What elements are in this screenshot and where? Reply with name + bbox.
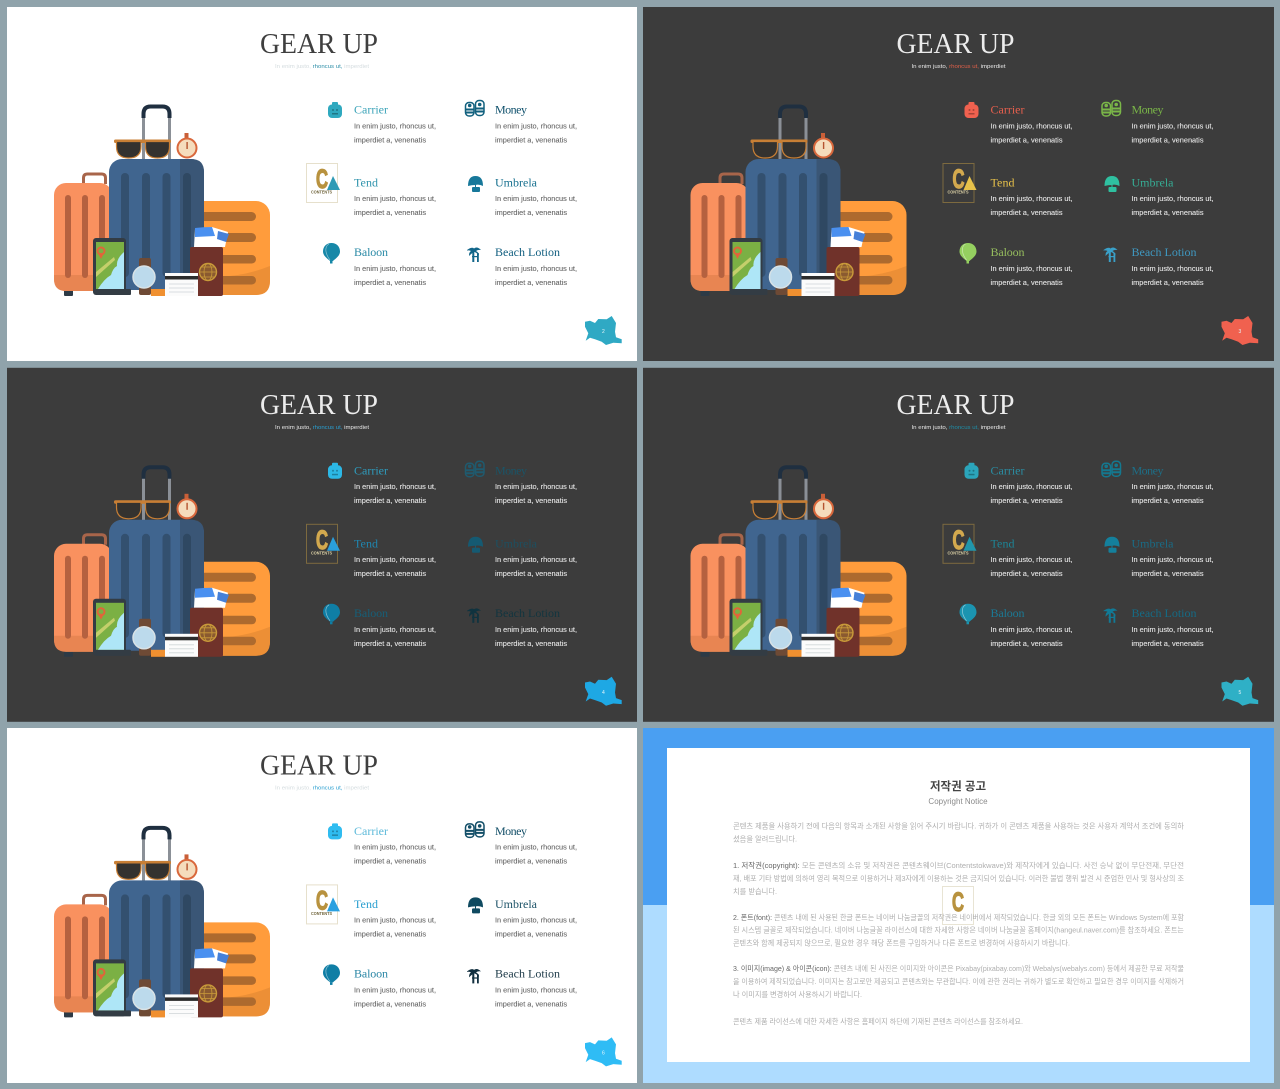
description: In enim justo, rhoncus ut, bbox=[354, 265, 436, 273]
description: imperdiet a, venenatis bbox=[495, 570, 567, 578]
icon: umbrella bbox=[468, 176, 483, 192]
subtitle: In enim justo, rhoncus ut, imperdiet bbox=[275, 425, 369, 431]
description: In enim justo, rhoncus ut, bbox=[990, 265, 1073, 273]
item title: Baloon bbox=[354, 606, 388, 620]
item: Baloon bbox=[323, 604, 436, 648]
icon: balloon bbox=[960, 604, 976, 624]
item: Money bbox=[466, 461, 577, 505]
page badge bbox=[1222, 677, 1258, 706]
description bbox=[354, 986, 436, 1008]
panel: slide 3 dark blue fade bbox=[7, 368, 637, 722]
icon: balloon bbox=[323, 964, 340, 985]
description bbox=[1132, 556, 1214, 578]
description: In enim justo, rhoncus ut, bbox=[495, 265, 577, 273]
item: Umbrela bbox=[468, 897, 577, 938]
item: Umbrela bbox=[468, 176, 577, 217]
item title: Money bbox=[1132, 463, 1164, 477]
item title: Carrier bbox=[354, 824, 388, 838]
icon: logo bbox=[943, 524, 976, 563]
title: GEAR UP bbox=[260, 390, 378, 421]
description: In enim justo, rhoncus ut, bbox=[354, 986, 436, 994]
item title: Carrier bbox=[354, 463, 388, 477]
notice body text: 을 이용하여 제작되었습니다. 이미지는 참고로만 제공되고 콘텐츠와는 무관합니다. 이에 관한 권리는 귀하가 별도로 확인하고 필요한 경우 이미지를 삭제하거 bbox=[733, 977, 1184, 986]
description bbox=[495, 844, 577, 866]
description: In enim justo, rhoncus ut, bbox=[495, 122, 577, 130]
item: Umbrela bbox=[468, 536, 577, 578]
description: imperdiet a, venenatis bbox=[990, 640, 1063, 648]
description bbox=[1132, 265, 1214, 287]
description: In enim justo, rhoncus ut, bbox=[990, 195, 1073, 203]
description bbox=[1132, 483, 1214, 505]
description: imperdiet a, venenatis bbox=[1132, 640, 1204, 648]
item: Tend bbox=[943, 524, 1073, 578]
item title: Carrier bbox=[990, 102, 1024, 116]
description: In enim justo, rhoncus ut, bbox=[990, 626, 1073, 634]
item: Carrier bbox=[328, 823, 436, 866]
description: imperdiet a, venenatis bbox=[354, 858, 426, 866]
title: GEAR UP bbox=[896, 390, 1014, 421]
notice body text: 된 시스템 글꼴로 제작되었습니다. 네이버 나눔글꼴 라이선스에 대한 자세한 사항은 네이버 나눔글꼴 홈페이지(hangeul.naver.com)를 참조하세요. 폰트는 bbox=[733, 926, 1184, 934]
description: imperdiet a, venenatis bbox=[495, 497, 567, 505]
description bbox=[495, 556, 577, 578]
description: In enim justo, rhoncus ut, bbox=[354, 556, 436, 564]
description: imperdiet a, venenatis bbox=[354, 136, 426, 144]
icon: carrier bbox=[328, 823, 342, 839]
icon: logo bbox=[306, 524, 340, 563]
item title: Beach Lotion bbox=[1132, 245, 1196, 259]
description: In enim justo, rhoncus ut, bbox=[354, 626, 436, 634]
item: Carrier bbox=[328, 463, 436, 505]
description: In enim justo, rhoncus ut, bbox=[354, 844, 436, 852]
item title: Baloon bbox=[354, 245, 388, 259]
item title: Umbrela bbox=[495, 536, 538, 550]
icon: logo: CONTENTS bbox=[948, 550, 969, 555]
description: imperdiet a, venenatis bbox=[354, 930, 426, 938]
item: Baloon bbox=[323, 243, 436, 287]
icon: money bbox=[466, 822, 484, 837]
item: Tend bbox=[306, 885, 436, 938]
item title: Beach Lotion bbox=[495, 966, 560, 980]
icon: logo bbox=[943, 164, 976, 202]
icon: carrier bbox=[328, 102, 342, 118]
page badge bbox=[585, 316, 622, 345]
description: imperdiet a, venenatis bbox=[495, 858, 567, 866]
icon: carrier bbox=[328, 463, 342, 479]
panel: slide 4 dark teal bbox=[643, 368, 1274, 722]
notice body text: 콘텐츠와 함께 제공되지 않으므로, 필요한 경우 해당 폰트를 구입하거나 다른 폰트로 변경하여 사용하시기 바랍니다. bbox=[733, 938, 1070, 948]
item: Tend bbox=[943, 164, 1073, 217]
icon: balloon bbox=[323, 604, 340, 624]
icon: carrier bbox=[964, 463, 978, 479]
item: Baloon bbox=[960, 243, 1073, 287]
item: Beach Lotion bbox=[1104, 606, 1214, 648]
item: Beach Lotion bbox=[467, 606, 577, 648]
item title: Tend bbox=[990, 176, 1014, 190]
page badge: 4 bbox=[602, 690, 605, 696]
description: In enim justo, rhoncus ut, bbox=[990, 122, 1073, 130]
notice body text: 치를 받습니다. bbox=[733, 887, 777, 896]
description: imperdiet a, venenatis bbox=[495, 136, 567, 144]
item: Baloon bbox=[323, 964, 436, 1008]
icon: money bbox=[466, 461, 484, 477]
watermark logo: C bbox=[952, 887, 964, 917]
item: Beach Lotion bbox=[467, 245, 577, 287]
description: In enim justo, rhoncus ut, bbox=[1132, 626, 1214, 634]
icon: palm bbox=[467, 248, 481, 262]
icon: umbrella bbox=[1104, 537, 1120, 553]
icon: palm bbox=[467, 608, 481, 623]
description: In enim justo, rhoncus ut, bbox=[495, 195, 577, 203]
description: imperdiet a, venenatis bbox=[990, 497, 1063, 505]
description: In enim justo, rhoncus ut, bbox=[1132, 195, 1214, 203]
illustration: luggage bbox=[54, 828, 270, 1017]
description bbox=[354, 844, 436, 866]
notice body text: 재, 배포 기타 방법에 의하여 영리 목적으로 이용하거나 제3자에게 이용하는 것은 금지되어 있습니다. 이러한 불법 행위 발견 시 준엄한 민사 및 형사상의 조 bbox=[733, 874, 1184, 883]
item: Carrier bbox=[328, 102, 436, 144]
notice background top bbox=[643, 728, 1274, 905]
item: Umbrela bbox=[1104, 176, 1214, 217]
description: imperdiet a, venenatis bbox=[354, 1000, 426, 1008]
page badge: 3 bbox=[1238, 329, 1242, 335]
panel: slide 1 light bbox=[7, 7, 637, 361]
icon: logo: CONTENTS bbox=[948, 190, 969, 194]
icon: umbrella bbox=[1104, 176, 1120, 192]
illustration: luggage bbox=[54, 106, 270, 296]
description: In enim justo, rhoncus ut, bbox=[354, 916, 436, 924]
page badge: 2 bbox=[602, 329, 605, 335]
notice subheading: Copyright Notice bbox=[928, 797, 988, 806]
icon: balloon bbox=[323, 243, 340, 264]
item title: Beach Lotion bbox=[495, 245, 560, 259]
subtitle: In enim justo, rhoncus ut, imperdiet bbox=[275, 64, 369, 70]
notice heading: 저작권 공고 bbox=[930, 779, 986, 793]
description bbox=[495, 265, 577, 287]
icon: palm bbox=[1104, 248, 1118, 262]
icon: umbrella bbox=[468, 537, 483, 553]
item: Money bbox=[1102, 100, 1214, 144]
item title: Beach Lotion bbox=[495, 606, 560, 620]
item title: Baloon bbox=[990, 245, 1024, 259]
item title: Beach Lotion bbox=[1132, 606, 1196, 620]
page badge: 6 bbox=[602, 1050, 605, 1056]
icon: umbrella bbox=[468, 897, 483, 913]
description: In enim justo, rhoncus ut, bbox=[1132, 265, 1214, 273]
notice card bbox=[667, 748, 1250, 1062]
description bbox=[990, 556, 1073, 578]
notice body text bbox=[733, 822, 1184, 1026]
icon: money bbox=[1102, 461, 1120, 477]
item title: Umbrela bbox=[495, 897, 538, 911]
item title: Money bbox=[495, 102, 527, 116]
icon: money bbox=[466, 100, 484, 116]
subtitle: In enim justo, rhoncus ut, imperdiet bbox=[912, 64, 1006, 70]
item title: Money bbox=[1132, 102, 1164, 116]
page badge: 5 bbox=[1238, 690, 1242, 696]
item: Baloon bbox=[960, 604, 1073, 648]
item: Beach Lotion bbox=[467, 966, 577, 1008]
item title: Umbrela bbox=[495, 176, 538, 190]
icon: logo bbox=[306, 885, 340, 924]
description bbox=[354, 265, 436, 287]
description: In enim justo, rhoncus ut, bbox=[990, 483, 1073, 491]
notice body text: 콘텐츠 제품을 사용하기 전에 다음의 항목과 소개된 사항을 읽어 주시기 바랍니다. 귀하가 이 콘텐츠 제품을 사용하는 것은 사용자 계약서 조건에 동의하 bbox=[733, 822, 1184, 830]
description: imperdiet a, venenatis bbox=[990, 209, 1063, 217]
description: In enim justo, rhoncus ut, bbox=[495, 556, 577, 564]
description bbox=[1132, 626, 1214, 648]
description: imperdiet a, venenatis bbox=[1132, 279, 1204, 287]
description: imperdiet a, venenatis bbox=[1132, 136, 1204, 144]
item title: Tend bbox=[354, 897, 378, 911]
description: In enim justo, rhoncus ut, bbox=[990, 556, 1073, 564]
description bbox=[990, 195, 1073, 217]
description: imperdiet a, venenatis bbox=[354, 640, 426, 648]
item: Umbrela bbox=[1104, 536, 1214, 578]
description bbox=[495, 483, 577, 505]
icon: logo: CONTENTS bbox=[311, 550, 332, 555]
description: imperdiet a, venenatis bbox=[990, 570, 1063, 578]
notice body text: 3. 이미지(image) & 아이콘(icon): 콘텐츠 내에 된 사진은 이미지와 아이콘은 Pixabay(pixabay.com)와 Webalys(webalys.com) 등에서 제공한 무료 저작물 bbox=[733, 964, 1184, 973]
page badge bbox=[585, 677, 622, 706]
description: In enim justo, rhoncus ut, bbox=[495, 916, 577, 924]
description bbox=[495, 626, 577, 648]
description: In enim justo, rhoncus ut, bbox=[1132, 556, 1214, 564]
illustration: luggage bbox=[54, 467, 270, 657]
item title: Umbrela bbox=[1132, 176, 1174, 190]
notice body text: 2. 폰트(font): 콘텐츠 내에 된 사용된 한글 폰트는 네이버 나눔글꼴의 저작권은 네이버에서 제작되었습니다. 한글 외의 모든 폰트는 Windows System에 포함 bbox=[733, 913, 1184, 922]
description: In enim justo, rhoncus ut, bbox=[495, 483, 577, 491]
description bbox=[354, 195, 436, 217]
description: In enim justo, rhoncus ut, bbox=[354, 195, 436, 203]
item: Beach Lotion bbox=[1104, 245, 1214, 287]
description bbox=[495, 195, 577, 217]
notice background bottom bbox=[643, 905, 1274, 1083]
icon: logo bbox=[306, 164, 340, 202]
icon: palm bbox=[1104, 608, 1118, 623]
item: Carrier bbox=[964, 463, 1073, 505]
panel: slide 2 dark multicolour bbox=[643, 7, 1274, 361]
title: GEAR UP bbox=[896, 29, 1014, 60]
description bbox=[495, 986, 577, 1008]
description: imperdiet a, venenatis bbox=[495, 209, 567, 217]
icon: logo: C bbox=[952, 525, 964, 555]
subtitle: In enim justo, rhoncus ut, imperdiet bbox=[912, 425, 1006, 431]
item title: Money bbox=[495, 824, 527, 838]
item title: Money bbox=[495, 463, 527, 477]
slide background bbox=[7, 368, 637, 722]
item title: Tend bbox=[990, 536, 1014, 550]
description: In enim justo, rhoncus ut, bbox=[495, 986, 577, 994]
description bbox=[990, 626, 1073, 648]
description: imperdiet a, venenatis bbox=[1132, 570, 1204, 578]
description: In enim justo, rhoncus ut, bbox=[354, 483, 436, 491]
panel: slide 5 light blue bbox=[7, 728, 637, 1083]
icon: logo: CONTENTS bbox=[311, 911, 332, 916]
item: Carrier bbox=[964, 102, 1073, 144]
notice body text: 콘텐츠 제품 라이선스에 대한 자세한 사항은 홈페이지 하단에 기재된 콘텐츠 라이선스를 참조하세요. bbox=[733, 1017, 1023, 1026]
item title: Umbrela bbox=[1132, 536, 1174, 550]
watermark logo bbox=[942, 886, 974, 924]
icon: logo: C bbox=[316, 525, 328, 555]
item title: Carrier bbox=[354, 102, 388, 116]
description bbox=[354, 556, 436, 578]
item title: Carrier bbox=[990, 463, 1024, 477]
description: imperdiet a, venenatis bbox=[495, 1000, 567, 1008]
notice body text: 셨음을 알려드립니다. bbox=[733, 834, 797, 844]
icon: logo: C bbox=[952, 164, 964, 194]
description bbox=[354, 483, 436, 505]
description: imperdiet a, venenatis bbox=[1132, 497, 1204, 505]
item: Tend bbox=[306, 164, 436, 217]
icon: palm bbox=[467, 969, 481, 983]
item: Money bbox=[466, 100, 577, 144]
icon: carrier bbox=[964, 102, 978, 118]
page badge bbox=[1222, 316, 1258, 345]
icon: logo: C bbox=[316, 885, 328, 915]
description: imperdiet a, venenatis bbox=[354, 279, 426, 287]
description: In enim justo, rhoncus ut, bbox=[1132, 483, 1214, 491]
item title: Tend bbox=[354, 536, 378, 550]
description: imperdiet a, venenatis bbox=[495, 930, 567, 938]
description: In enim justo, rhoncus ut, bbox=[1132, 122, 1214, 130]
description: imperdiet a, venenatis bbox=[495, 279, 567, 287]
description bbox=[495, 122, 577, 144]
description bbox=[354, 916, 436, 938]
item title: Baloon bbox=[354, 966, 388, 980]
illustration: luggage bbox=[690, 467, 906, 657]
icon: balloon bbox=[960, 243, 976, 264]
description bbox=[354, 626, 436, 648]
slide background bbox=[7, 728, 637, 1083]
description bbox=[990, 122, 1073, 144]
slide background bbox=[643, 7, 1274, 361]
icon: money bbox=[1102, 100, 1120, 116]
title: GEAR UP bbox=[260, 29, 378, 60]
subtitle: In enim justo, rhoncus ut, imperdiet bbox=[275, 785, 369, 791]
description: In enim justo, rhoncus ut, bbox=[354, 122, 436, 130]
description: imperdiet a, venenatis bbox=[354, 570, 426, 578]
notice body text: 1. 저작권(copyright): 모든 콘텐츠의 소유 및 저작권은 콘텐츠웨이브(Contentstokwave)와 제작자에게 있습니다. 사전 승낙 없이 무단전재, 무단전 bbox=[733, 861, 1184, 870]
description bbox=[990, 483, 1073, 505]
panel: copyright notice bbox=[643, 728, 1274, 1083]
item: Money bbox=[1102, 461, 1214, 505]
description: imperdiet a, venenatis bbox=[990, 279, 1063, 287]
title: GEAR UP bbox=[260, 750, 378, 781]
description bbox=[495, 916, 577, 938]
description bbox=[1132, 122, 1214, 144]
description: imperdiet a, venenatis bbox=[354, 497, 426, 505]
page badge bbox=[585, 1037, 622, 1066]
description: In enim justo, rhoncus ut, bbox=[495, 626, 577, 634]
description: imperdiet a, venenatis bbox=[495, 640, 567, 648]
icon: logo: C bbox=[316, 164, 328, 194]
description: imperdiet a, venenatis bbox=[990, 136, 1063, 144]
illustration: luggage bbox=[690, 106, 906, 296]
item: Tend bbox=[306, 524, 436, 578]
description: imperdiet a, venenatis bbox=[354, 209, 426, 217]
description: In enim justo, rhoncus ut, bbox=[495, 844, 577, 852]
notice body text: 나 이미지를 변경하여 사용하시기 바랍니다. bbox=[733, 990, 862, 999]
icon: logo: CONTENTS bbox=[311, 190, 332, 194]
description: imperdiet a, venenatis bbox=[1132, 209, 1204, 217]
item title: Baloon bbox=[990, 606, 1024, 620]
description bbox=[990, 265, 1073, 287]
slide background bbox=[7, 7, 637, 361]
item: Money bbox=[466, 822, 577, 866]
description bbox=[1132, 195, 1214, 217]
slide background bbox=[643, 368, 1274, 722]
description bbox=[354, 122, 436, 144]
item title: Tend bbox=[354, 176, 378, 190]
